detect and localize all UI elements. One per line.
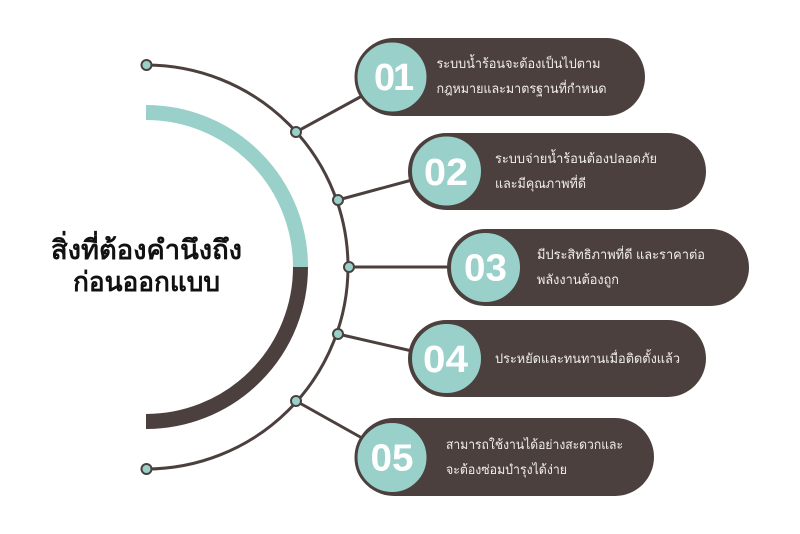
item 02	[408, 133, 706, 210]
title: ก่อนออกแบบ	[73, 267, 220, 297]
item 03: มีประสิทธิภาพที่ดี และราคาต่อ	[537, 246, 705, 262]
item 05: จะต้องซ่อมบำรุงได้ง่าย	[446, 462, 567, 478]
item 03	[447, 229, 749, 306]
thin outer arc	[146, 65, 348, 469]
item 01: ระบบน้ำร้อนจะต้องเป็นไปตาม	[436, 54, 600, 71]
item 01: กฎหมายและมาตรฐานที่กำหนด	[436, 80, 606, 97]
item 02: และมีคุณภาพที่ดี	[495, 175, 586, 192]
item 04	[408, 320, 706, 397]
item 05: สามารถใช้งานได้อย่างสะดวกและ	[446, 437, 623, 452]
item 04: 04	[423, 339, 468, 381]
item 03: พลังงานต้องถูก	[537, 272, 619, 288]
item 01: 01	[374, 57, 414, 99]
connector lines	[296, 96, 450, 438]
item 02: 02	[424, 152, 468, 194]
item 03: 03	[464, 248, 507, 290]
item 05	[355, 418, 654, 496]
item 04: ประหยัดและทนทานเมื่อติดตั้งแล้ว	[495, 349, 680, 366]
item 02: ระบบจ่ายน้ำร้อนต้องปลอดภัย	[495, 149, 657, 166]
title: สิ่งที่ต้องคำนึงถึง	[51, 230, 242, 265]
item 05: 05	[370, 438, 414, 480]
item 01	[355, 38, 645, 116]
title	[51, 230, 242, 297]
arc end and junction nodes	[142, 60, 354, 474]
thick arc: teal upper half	[146, 112, 300, 267]
thick arc: dark lower half	[146, 267, 300, 422]
